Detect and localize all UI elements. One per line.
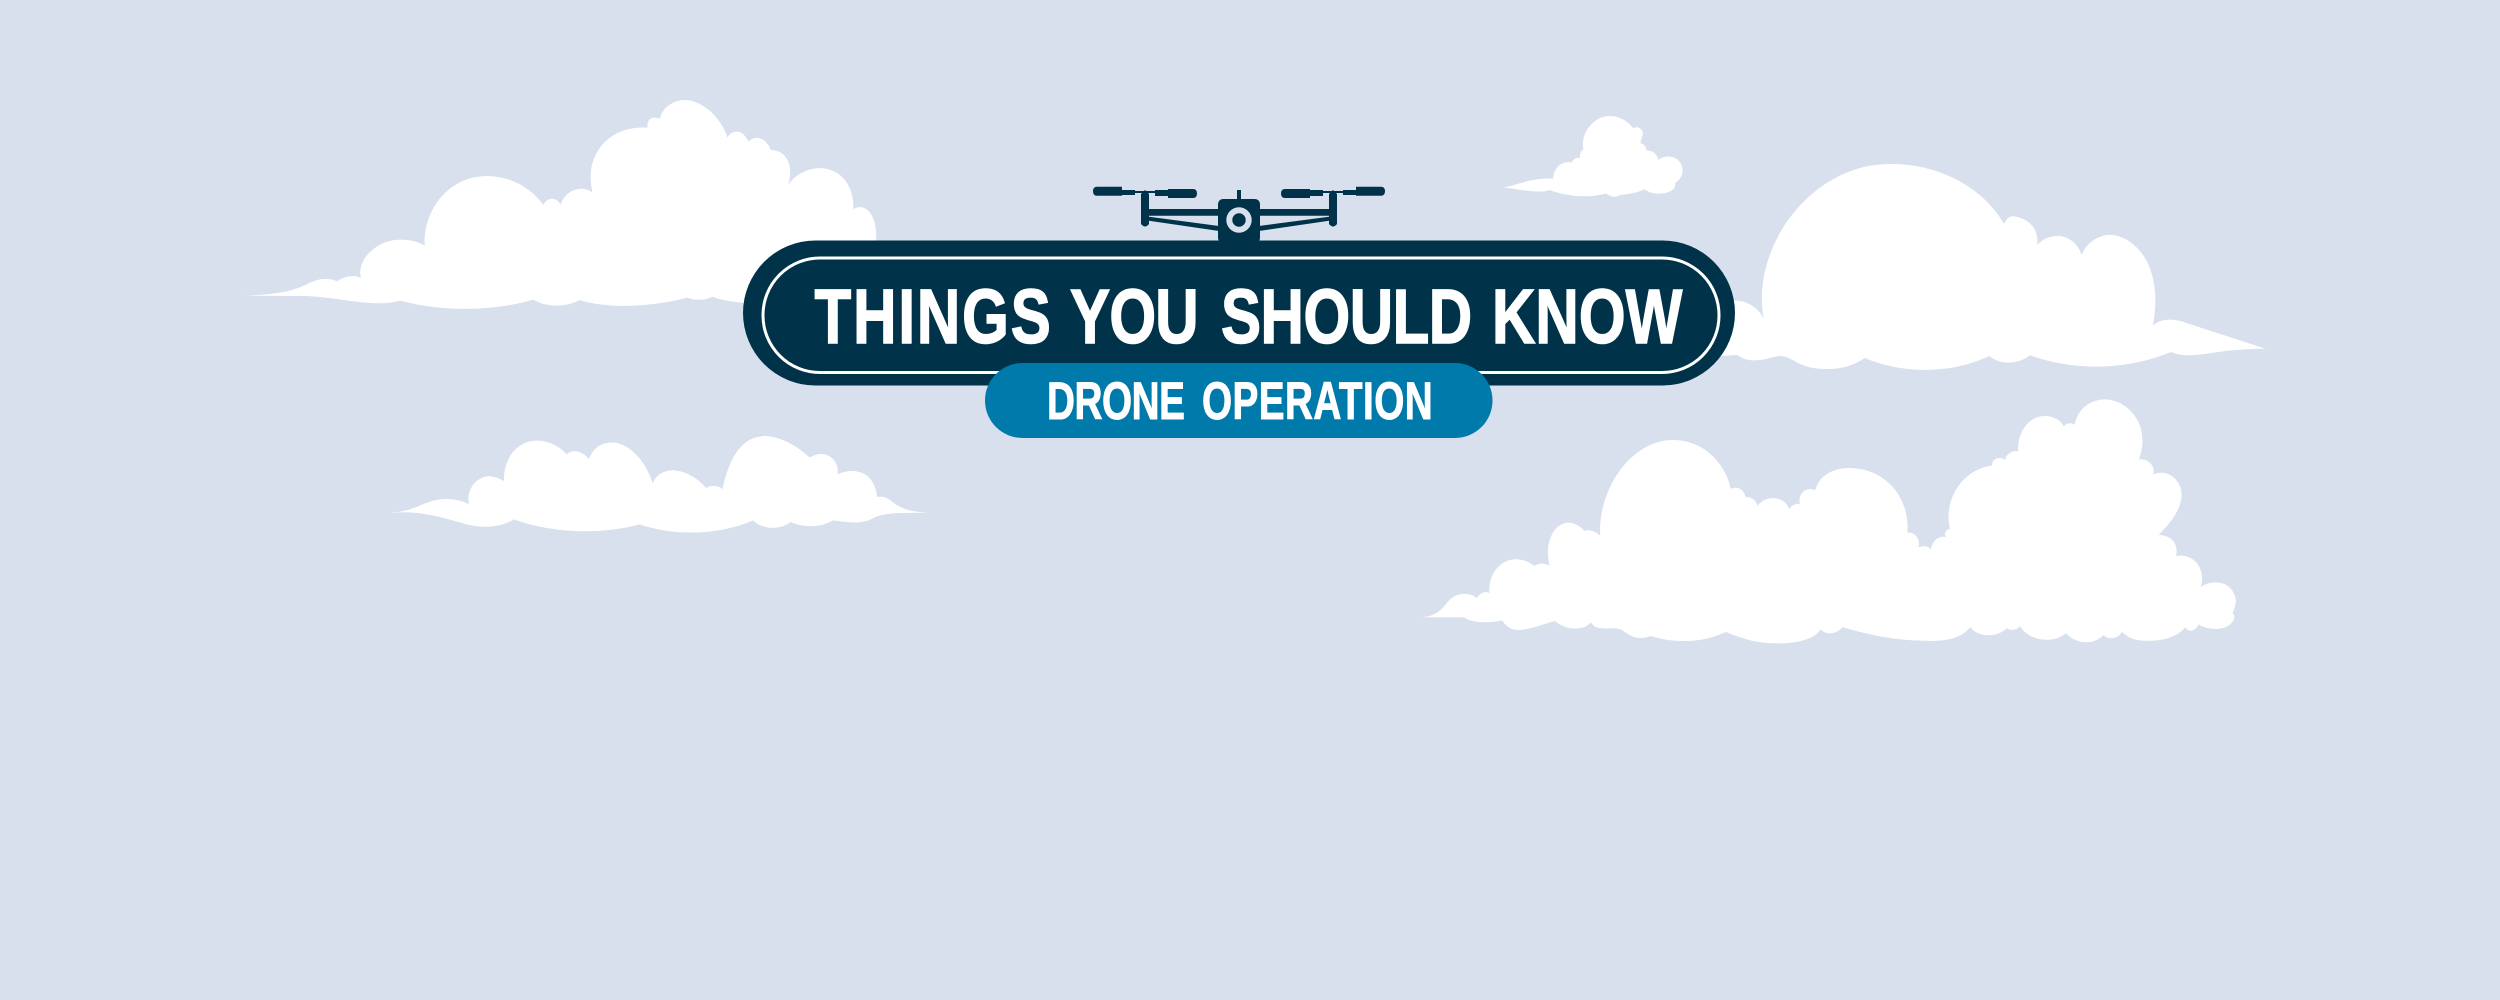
cloud: small top right xyxy=(1503,116,1683,197)
title xyxy=(814,273,1683,360)
drone: right rotor xyxy=(1281,187,1385,198)
drone: camera lens xyxy=(1232,213,1246,227)
banner: dark pill xyxy=(743,240,1735,386)
subtitle: DRONE xyxy=(1047,371,1185,430)
subtitle xyxy=(1047,371,1433,430)
cloud: upper left xyxy=(243,100,876,309)
drone: camera ring xyxy=(1226,207,1252,233)
cloud: lower right large xyxy=(1421,399,2236,643)
cloud: upper right large xyxy=(1680,164,2265,370)
icon: drone xyxy=(1093,187,1385,243)
drone: left rotor xyxy=(1093,187,1197,198)
subtitle pill xyxy=(985,363,1492,438)
drone: right motor post xyxy=(1329,190,1337,226)
title: SHOULD xyxy=(1221,273,1472,360)
drone: body xyxy=(1218,199,1260,243)
title: YOU xyxy=(1070,273,1199,360)
drone: left arm struts xyxy=(1149,209,1219,231)
drone: right arm struts xyxy=(1259,209,1329,231)
cloud: lower left xyxy=(392,436,928,533)
title: KNOW xyxy=(1492,273,1683,360)
drone: antenna xyxy=(1237,190,1241,200)
title: THINGS xyxy=(814,273,1051,360)
drone: left motor post xyxy=(1141,190,1149,226)
banner: inner outline xyxy=(763,258,1719,372)
subtitle: OPERATION xyxy=(1202,371,1433,430)
